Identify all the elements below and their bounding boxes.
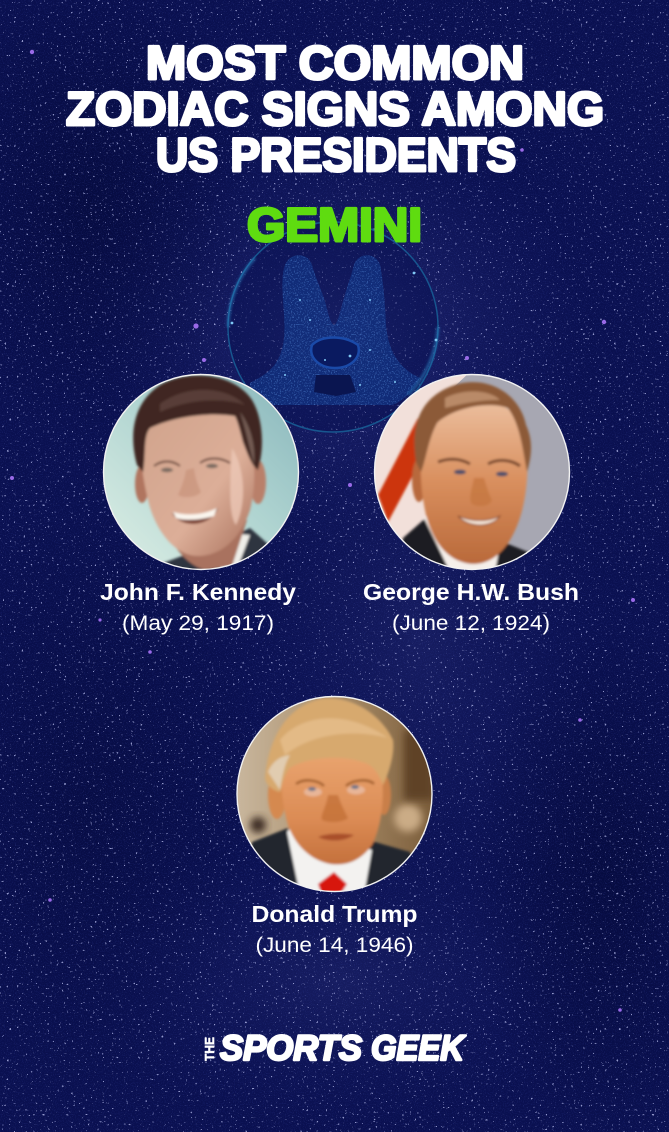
face features — [154, 458, 230, 466]
title: US PRESIDENTS — [156, 128, 516, 181]
title — [66, 36, 604, 181]
title: ZODIAC SIGNS AMONG — [66, 82, 604, 135]
logo: The Sports Geek: GEEK — [371, 1029, 467, 1068]
label: John F. Kennedy: John F. Kennedy — [100, 579, 296, 605]
label: John F. Kennedy — [100, 579, 296, 635]
face features — [296, 780, 374, 786]
label: Donald Trump: (June 14, 1946) — [256, 933, 414, 957]
title: MOST COMMON — [146, 36, 524, 89]
label: Donald Trump — [252, 901, 418, 957]
label: George H.W. Bush: (June 12, 1924) — [392, 611, 550, 635]
label: John F. Kennedy: (May 29, 1917) — [122, 611, 274, 635]
hair — [414, 382, 531, 472]
heading: Gemini: GEMINI — [247, 198, 422, 251]
logo: The Sports Geek: SPORTS — [220, 1029, 362, 1068]
portrait: George H.W. Bush — [372, 372, 574, 572]
logo: The Sports Geek — [202, 1029, 467, 1068]
icon: Gemini twins constellation — [228, 222, 438, 432]
face features — [438, 459, 520, 466]
label: George H.W. Bush — [363, 579, 579, 635]
portrait: John F. Kennedy — [100, 372, 302, 580]
logo: The Sports Geek: THE — [202, 1037, 217, 1061]
label: Donald Trump: Donald Trump — [252, 901, 418, 927]
portrait: Donald Trump — [235, 695, 435, 895]
suit and collar — [163, 526, 268, 569]
label: George H.W. Bush: George H.W. Bush — [363, 579, 579, 605]
hair — [265, 698, 393, 792]
hair — [133, 375, 262, 472]
